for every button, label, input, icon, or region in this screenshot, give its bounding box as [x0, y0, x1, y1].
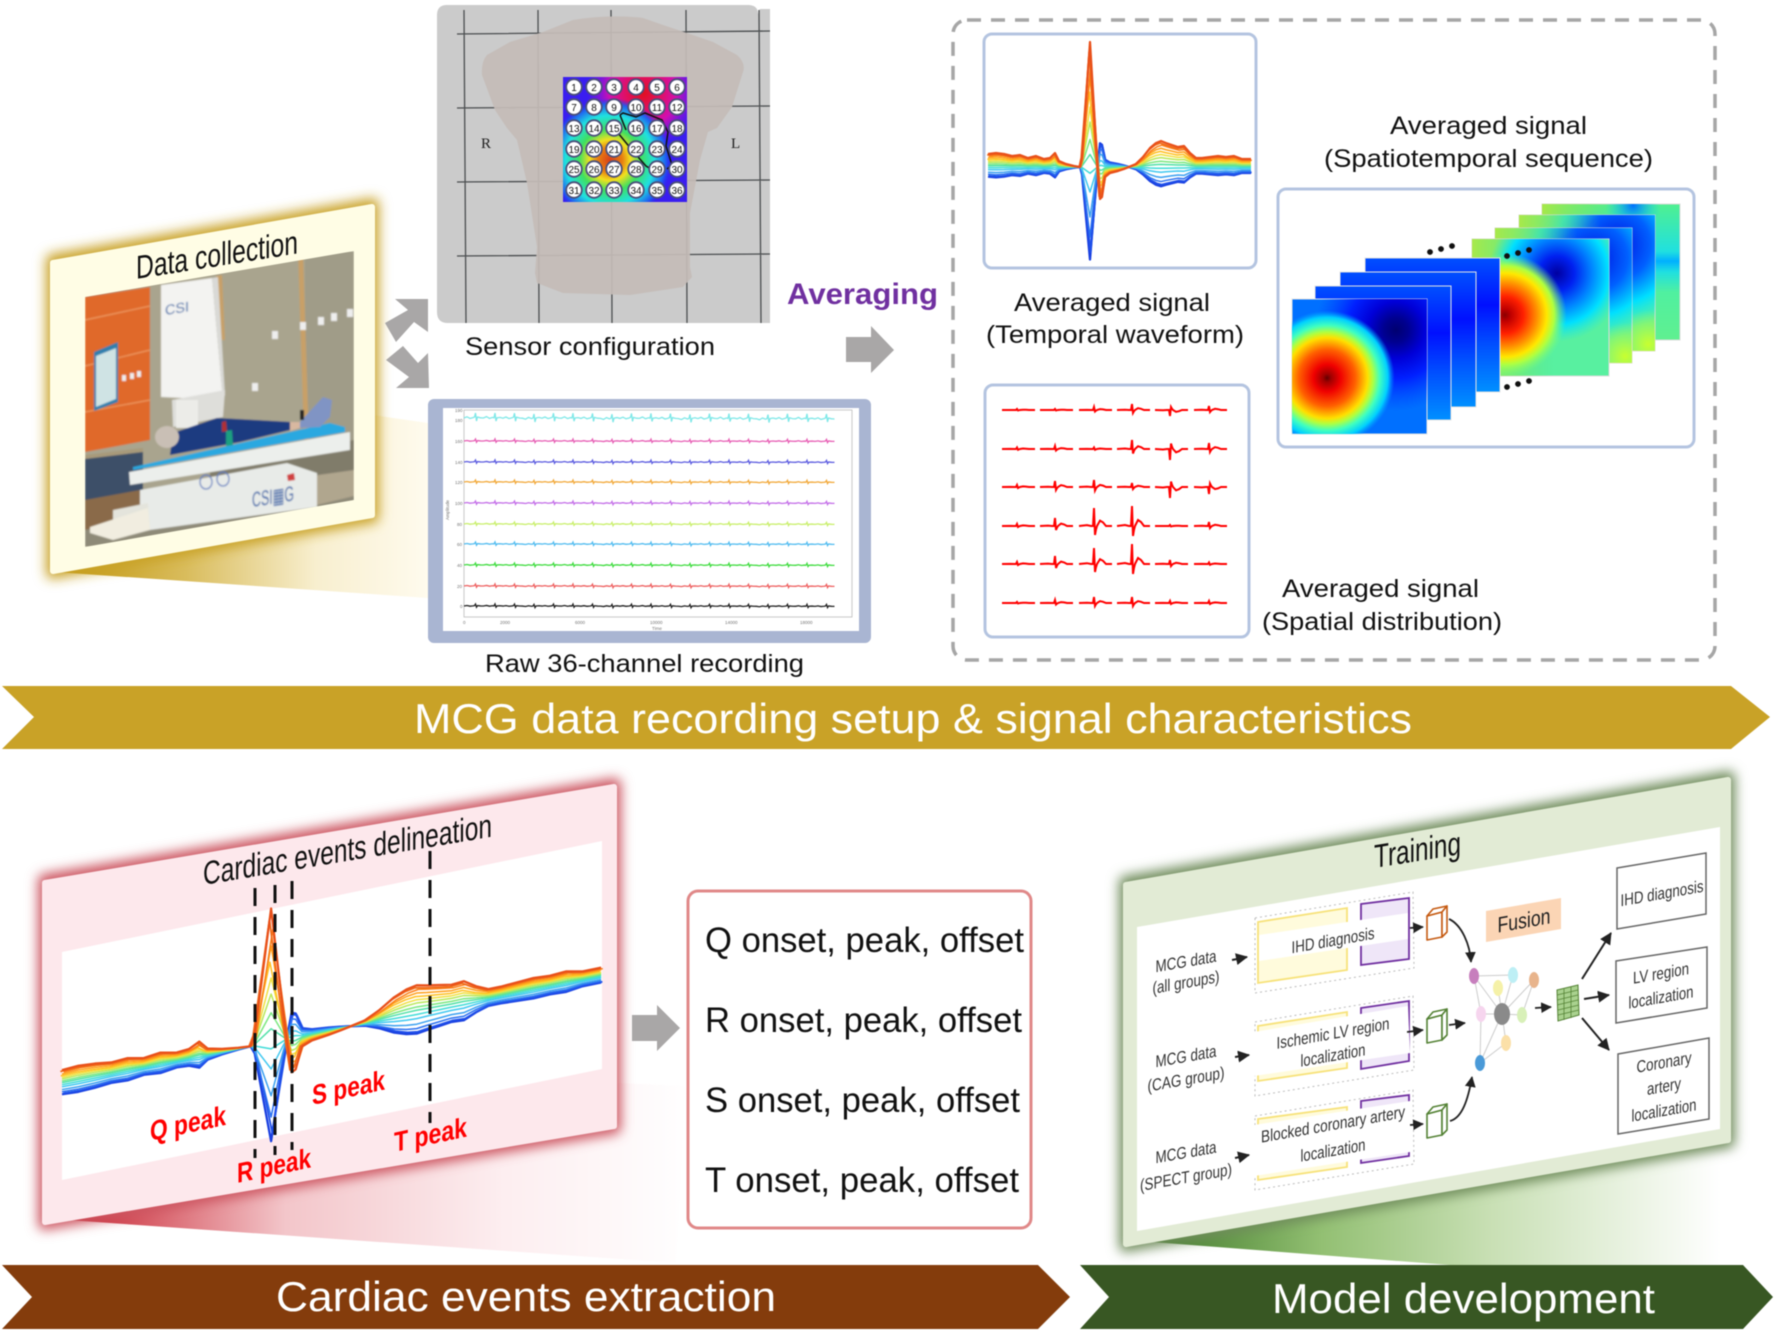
sensor heat map with 36 numbered channels: 9 — [611, 103, 617, 114]
front frame stack — [1292, 258, 1500, 434]
axis labels: 20 — [457, 584, 463, 589]
axis labels: 0 — [463, 620, 466, 625]
label R: R — [481, 136, 491, 152]
sensor heat map with 36 numbered channels: 22 — [630, 145, 642, 156]
panel: training — [1125, 777, 1729, 1246]
banner title: MCG data recording setup & signal characteristics — [414, 695, 1412, 742]
task block: blocked coronary artery localization: Blocked coronary artery — [1261, 1101, 1405, 1147]
caption: temporal waveform: (Temporal waveform) — [986, 321, 1244, 349]
panel: data collection — [52, 204, 373, 573]
peak labels: S peak — [312, 1064, 385, 1111]
sensor heat map with 36 numbered channels: 17 — [651, 124, 663, 135]
panel foot: training gradient — [1152, 1141, 1720, 1265]
panel: spatial distribution — [985, 385, 1249, 637]
axis labels — [445, 408, 813, 631]
sensor heat map with 36 numbered channels: 20 — [588, 145, 600, 156]
axis labels: 18000 — [800, 620, 813, 625]
peak labels — [150, 1064, 467, 1189]
sensor heat map with 36 numbered channels: 26 — [588, 165, 600, 176]
fused feature grid — [1557, 985, 1579, 1021]
input arrows — [1232, 957, 1249, 1158]
axis labels: 140 — [455, 460, 463, 465]
panel: extracted event list — [688, 891, 1031, 1228]
axis labels: 100 — [455, 501, 463, 506]
panel: temporal waveform — [984, 34, 1256, 268]
task block: IHD diagnosis — [1255, 892, 1414, 993]
output arrows — [1582, 933, 1611, 1050]
feature arrows — [1407, 919, 1472, 1125]
back frame stack — [1472, 204, 1680, 376]
axis labels: 0 — [460, 604, 463, 609]
heading: training: Training — [1374, 825, 1461, 876]
sensor heat map with 36 numbered channels: 13 — [568, 124, 580, 135]
axis labels: 190 — [455, 408, 463, 413]
axis labels: Time — [652, 626, 662, 631]
feature cubes — [1427, 906, 1447, 1138]
sensor heat map with 36 numbered channels: 15 — [608, 124, 620, 135]
caption: temporal waveform: Averaged signal — [1014, 289, 1210, 317]
sensor heat map with 36 numbered channels: 33 — [608, 186, 620, 197]
task block: IHD diagnosis: IHD diagnosis — [1292, 923, 1374, 957]
input labels: MCG data — [1156, 1041, 1217, 1071]
channel traces — [464, 413, 834, 608]
photo: patient lying in MCG scanner: CSI▦G — [252, 482, 294, 512]
banner title: Cardiac events extraction — [276, 1273, 776, 1320]
axis labels: 14000 — [725, 620, 738, 625]
arrow: down to raw recording — [386, 346, 429, 388]
sensor heat map with 36 numbered channels: 12 — [671, 103, 683, 114]
input labels: (all groups) — [1152, 966, 1220, 998]
axis labels: 60 — [457, 542, 463, 547]
panel: raw 36-channel recording — [428, 399, 871, 643]
sensor heat map with 36 numbered channels: 2 — [591, 83, 597, 94]
sensor heat map with 36 numbered channels: 29 — [651, 165, 663, 176]
sensor heat map with 36 numbered channels: 5 — [654, 83, 660, 94]
label: averaging: Averaging — [787, 278, 938, 311]
caption: spatiotemporal sequence: Averaged signal — [1390, 112, 1587, 140]
photo: patient lying in MCG scanner: CSI — [165, 298, 189, 318]
sensor heat map with 36 numbered channels: 18 — [671, 124, 683, 135]
caption: spatial distribution — [1262, 575, 1502, 636]
peak labels: T peak — [394, 1111, 467, 1158]
peak labels: R peak — [237, 1142, 311, 1189]
sensor heat map with 36 numbered channels: 32 — [588, 186, 600, 197]
panel: spatiotemporal sequence — [1278, 189, 1694, 447]
output: coronary artery localization: localization — [1632, 1094, 1696, 1126]
arrow: averaging — [846, 326, 894, 373]
input labels: MCG data — [1156, 946, 1217, 976]
sensor heat map with 36 numbered channels: 21 — [608, 145, 620, 156]
fusion network — [1469, 967, 1539, 1071]
banner: model development — [1080, 1265, 1773, 1329]
sensor heat map with 36 numbered channels: 3 — [611, 83, 617, 94]
axis labels: Amplitude — [445, 499, 450, 520]
fusion label: Fusion — [1498, 903, 1550, 938]
input labels — [1140, 946, 1232, 1195]
output: LV region localization: LV region — [1633, 958, 1689, 988]
input labels: (CAG group) — [1148, 1062, 1224, 1096]
arrow: up to sensor configuration — [385, 299, 428, 342]
ellipsis dots — [1427, 243, 1532, 390]
event rows — [705, 921, 1024, 1200]
chart: temporal waveform butterfly plot — [987, 42, 1252, 260]
sensor heat map with 36 numbered channels: 31 — [568, 186, 580, 197]
panel: sensor configuration torso — [437, 5, 770, 323]
peak labels: Q peak — [150, 1099, 226, 1147]
caption: spatiotemporal sequence: (Spatiotemporal sequence) — [1324, 145, 1653, 173]
task block: ischemic LV region localization: localization — [1300, 1039, 1366, 1071]
output: coronary artery localization: Coronary — [1636, 1047, 1692, 1077]
sensor heat map with 36 numbered channels: 30 — [671, 165, 683, 176]
sensor heat map with 36 numbered channels: 25 — [568, 165, 580, 176]
task block: blocked coronary artery localization: localization — [1300, 1134, 1366, 1166]
panel: cardiac events delineation — [44, 784, 615, 1224]
sensor heat map with 36 numbered channels: 6 — [674, 83, 680, 94]
sensor heat map with 36 numbered channels: 34 — [630, 186, 642, 197]
input labels: MCG data — [1156, 1137, 1217, 1167]
dashed event markers — [255, 851, 430, 1158]
heading: data collection: Data collection — [136, 225, 298, 287]
fusion label — [1486, 898, 1561, 942]
banner title: Model development — [1272, 1275, 1655, 1322]
chart: 6x6 spatial waveforms — [1002, 404, 1227, 606]
sensor heat map with 36 numbered channels: 14 — [588, 124, 600, 135]
axis labels: 180 — [455, 418, 463, 423]
panel foot: data collection gradient — [55, 415, 428, 598]
caption: spatial distribution: Averaged signal — [1282, 575, 1479, 603]
sensor heat map with 36 numbered channels: 8 — [591, 103, 597, 114]
sensor heat map with 36 numbered channels: 11 — [652, 103, 663, 114]
output: IHD diagnosis: IHD diagnosis — [1620, 876, 1704, 910]
sensor heat map with 36 numbered channels: 16 — [630, 124, 642, 135]
task block: ischemic LV region localization — [1254, 996, 1414, 1096]
sensor heat map with 36 numbered channels: 24 — [671, 145, 683, 156]
output: LV region localization: localization — [1628, 981, 1694, 1013]
event rows: T onset, peak, offset — [705, 1161, 1019, 1200]
banner: cardiac events extraction — [2, 1265, 1070, 1329]
caption: spatiotemporal sequence — [1324, 112, 1653, 173]
task block: blocked coronary artery localization — [1254, 1090, 1414, 1190]
event rows: S onset, peak, offset — [705, 1081, 1020, 1120]
heading: Cardiac events delineation — [203, 808, 492, 893]
event rows: Q onset, peak, offset — [705, 921, 1024, 960]
input labels: (SPECT group) — [1140, 1159, 1232, 1195]
axis labels: 80 — [457, 522, 463, 527]
torso silhouette — [482, 16, 744, 295]
output: coronary artery localization: artery — [1647, 1073, 1681, 1099]
caption: sensor configuration: Sensor configuration — [465, 333, 715, 361]
panel: averaged signal dashed container — [953, 20, 1715, 660]
chart: delineated waveform — [60, 842, 603, 1183]
sensor heat map with 36 numbered channels: 4 — [633, 83, 639, 94]
sensor heat map with 36 numbered channels: 1 — [571, 83, 577, 94]
sensor heat map with 36 numbered channels: 35 — [651, 186, 663, 197]
sensor heat map with 36 numbered channels: 23 — [651, 145, 663, 156]
arrow: to event list — [632, 1005, 680, 1051]
axis labels: 120 — [455, 480, 463, 485]
event rows: R onset, peak, offset — [705, 1001, 1022, 1040]
sensor heat map with 36 numbered channels: 28 — [630, 165, 642, 176]
caption: raw 36-channel recording: Raw 36-channel recording — [485, 650, 804, 678]
axis labels: 10000 — [650, 620, 663, 625]
output: IHD diagnosis — [1617, 853, 1706, 929]
task block: ischemic LV region localization: Ischemic LV region — [1276, 1013, 1390, 1053]
caption: temporal waveform — [986, 289, 1244, 349]
sensor heat map with 36 numbered channels: 7 — [571, 103, 577, 114]
axis labels: 160 — [455, 439, 463, 444]
output: LV region localization — [1616, 947, 1707, 1023]
sensor heat map with 36 numbered channels: 10 — [630, 103, 642, 114]
photo: patient lying in MCG scanner — [85, 251, 354, 547]
sensor heat map with 36 numbered channels: 27 — [608, 165, 620, 176]
label L: L — [731, 136, 740, 152]
caption: spatial distribution: (Spatial distribution) — [1262, 608, 1502, 636]
banner: MCG data recording setup — [2, 686, 1770, 749]
sensor heat map with 36 numbered channels: 36 — [671, 186, 683, 197]
sensor heat map with 36 numbered channels — [563, 77, 687, 202]
axis labels: 40 — [457, 563, 463, 568]
arrow: network to feature grid — [1535, 1007, 1551, 1008]
axis labels: 2000 — [500, 620, 511, 625]
panel foot: cardiac gradient — [68, 1083, 686, 1263]
sensor heat map with 36 numbered channels: 19 — [568, 145, 580, 156]
axis labels: 6000 — [575, 620, 586, 625]
output: coronary artery localization — [1618, 1038, 1709, 1134]
